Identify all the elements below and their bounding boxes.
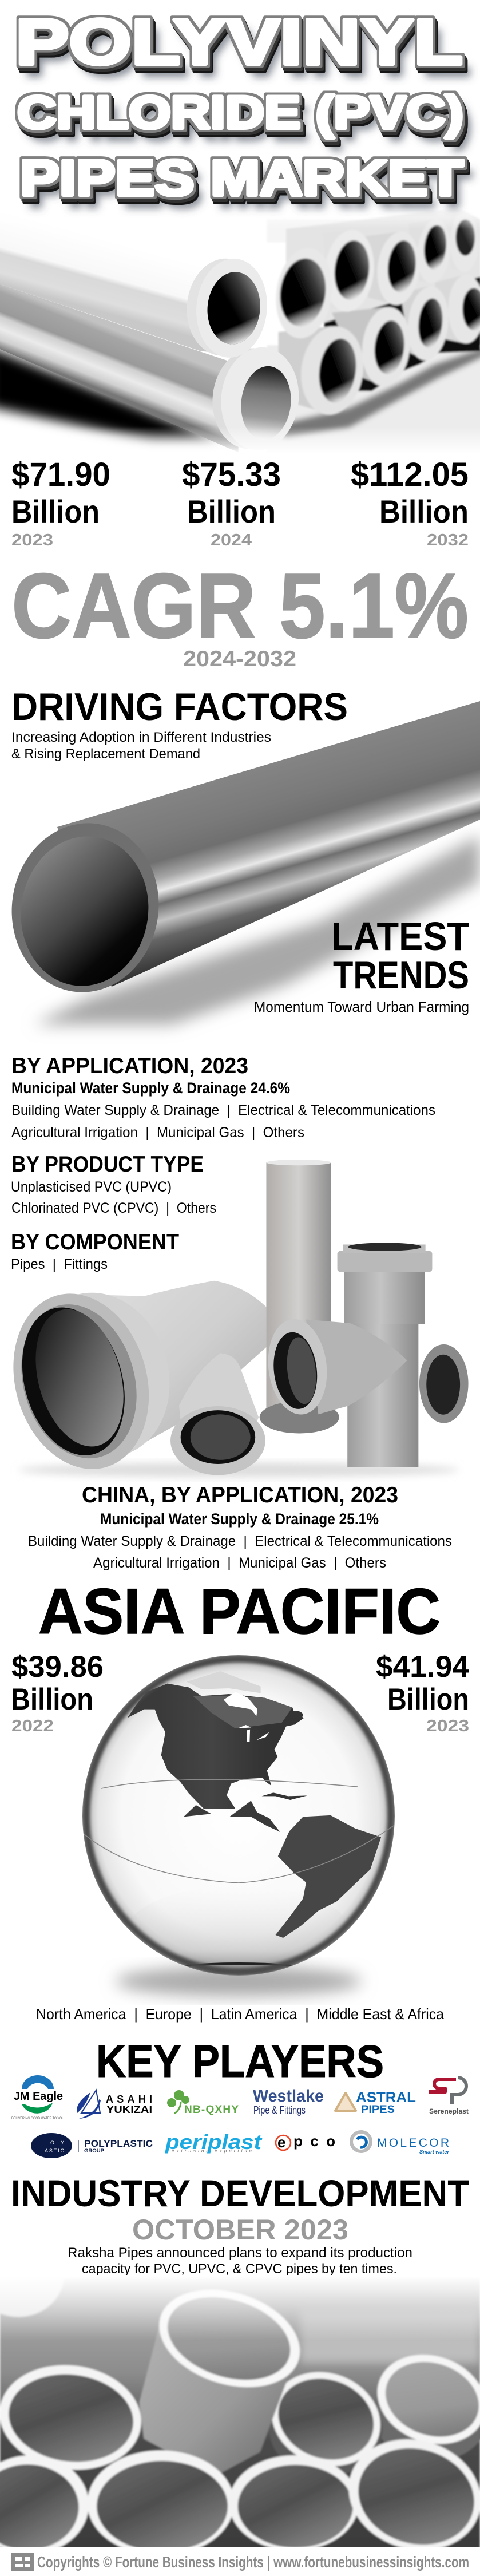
bottom row bbox=[279, 275, 480, 419]
title: POLYVINYL bbox=[15, 6, 463, 78]
by application bbox=[11, 1054, 435, 1141]
logo: Astral Pipes: ASTRAL bbox=[356, 2090, 416, 2106]
logo: Asahi Yukizai: ASAHI bbox=[106, 2094, 152, 2105]
latest trends bbox=[254, 914, 469, 1015]
logo: epco bbox=[276, 2132, 335, 2151]
tall pipe bbox=[260, 1160, 339, 1433]
pipe stack: left side bbox=[0, 247, 299, 452]
stat: 2032 bbox=[351, 456, 469, 549]
stat: 2023: 2023 bbox=[426, 1717, 469, 1735]
logo: Sereneplast: Sereneplast bbox=[429, 2107, 469, 2115]
latest trends: Momentum Toward Urban Farming bbox=[254, 998, 469, 1015]
pipe stack: right side bbox=[267, 208, 480, 460]
by application: BY APPLICATION, 2023 bbox=[11, 1054, 248, 1078]
CAGR: 2024-2032 bbox=[183, 647, 296, 671]
stat: 2023 bbox=[376, 1650, 470, 1735]
stat: 2032: $112.05 bbox=[351, 456, 469, 493]
key players heading: KEY PLAYERS bbox=[96, 2036, 384, 2087]
logo: Polyplastic: POLYPLASTIC bbox=[84, 2138, 153, 2149]
lower pipe bbox=[0, 284, 304, 454]
industry development: capacity for PVC, UPVC, & CPVC pipes by ten times. bbox=[82, 2261, 397, 2277]
logo: Asahi Yukizai: YUKIZAI bbox=[106, 2104, 152, 2115]
logo: JM Eagle: JM Eagle bbox=[14, 2090, 63, 2103]
continent: South America bbox=[184, 1801, 381, 1938]
stat: 2023: $41.94 bbox=[376, 1650, 470, 1684]
by product type: BY PRODUCT TYPE bbox=[11, 1152, 204, 1177]
china by application bbox=[28, 1483, 452, 1571]
china by application: Agricultural Irrigation | Municipal Gas | Others bbox=[93, 1555, 386, 1571]
logos bbox=[11, 2075, 469, 2158]
logo: Polyplastic: GROUP bbox=[84, 2148, 104, 2154]
stat: 2024 bbox=[182, 456, 281, 549]
driving factors: Increasing Adoption in Different Industries bbox=[11, 730, 271, 745]
regions list: North America | Europe | Latin America | Middle East & Africa bbox=[36, 2005, 445, 2023]
stat: 2022: 2022 bbox=[11, 1717, 54, 1735]
by component: BY COMPONENT bbox=[11, 1230, 179, 1255]
stat: 2024: Billion bbox=[187, 493, 276, 529]
driving factors: & Rising Replacement Demand bbox=[11, 746, 200, 762]
logo: Astral Pipes: PIPES bbox=[361, 2104, 395, 2116]
industry development bbox=[11, 2172, 469, 2277]
hero photo: stacked white PVC pipes bbox=[0, 195, 480, 460]
regional stats bbox=[11, 1650, 470, 1735]
bottom photo: PVC pipe cross-sections bbox=[0, 2275, 480, 2547]
logo: Sereneplast bbox=[429, 2078, 469, 2115]
by product type bbox=[11, 1152, 216, 1216]
logo: Polyplastic: OLY bbox=[50, 2140, 64, 2146]
logo: epco: pco bbox=[293, 2132, 335, 2150]
stat: 2022 bbox=[11, 1650, 104, 1735]
globe body bbox=[82, 1655, 395, 1976]
market size stats bbox=[11, 456, 469, 549]
by application: Agricultural Irrigation | Municipal Gas | Others bbox=[11, 1125, 304, 1141]
logo: Polyplastic bbox=[31, 2133, 153, 2158]
large socket pipe bbox=[0, 1279, 266, 1483]
logo: epco: e bbox=[277, 2134, 285, 2151]
by component bbox=[11, 1230, 179, 1272]
stat: 2022: Billion bbox=[11, 1683, 93, 1716]
china by application: CHINA, BY APPLICATION, 2023 bbox=[82, 1483, 398, 1507]
illustration: glass globe bbox=[82, 1655, 395, 1996]
logo: Westlake bbox=[253, 2087, 324, 2116]
top row bbox=[271, 212, 479, 342]
logo: Molecor: Smart water bbox=[419, 2149, 449, 2155]
logo: Asahi Yukizai bbox=[77, 2090, 152, 2119]
center pipe bbox=[138, 2289, 301, 2474]
stat: 2023 bbox=[11, 456, 110, 549]
asia pacific heading: ASIA PACIFIC bbox=[38, 1576, 441, 1647]
globe base shadow bbox=[116, 1966, 362, 1996]
logo: Periplast: periplast bbox=[165, 2130, 263, 2154]
logo: Molecor: MOLECOR bbox=[377, 2136, 449, 2150]
stat: 2023: 2023 bbox=[11, 531, 53, 549]
globe rim shade bbox=[86, 1659, 391, 1972]
logo: JM Eagle bbox=[11, 2075, 64, 2120]
stat: 2024: $75.33 bbox=[182, 456, 281, 493]
title bbox=[15, 6, 463, 206]
stat: 2023: Billion bbox=[387, 1683, 469, 1716]
globe contents bbox=[84, 1659, 394, 1977]
upper pipe bbox=[0, 247, 267, 358]
icon: Fortune Business Insights logo bbox=[11, 2553, 34, 2571]
logo: Westlake: Pipe & Fittings bbox=[253, 2104, 306, 2116]
T fitting bbox=[263, 1243, 432, 1467]
by component: Pipes | Fittings bbox=[11, 1256, 108, 1272]
driving factors: DRIVING FACTORS bbox=[11, 685, 348, 729]
stat: 2032: Billion bbox=[379, 493, 469, 529]
by product type: Unplasticised PVC (UPVC) bbox=[11, 1179, 172, 1195]
photo: PVC fittings bbox=[0, 1160, 469, 1483]
logo: Westlake: Westlake bbox=[253, 2087, 324, 2106]
by application: Municipal Water Supply & Drainage 24.6% bbox=[11, 1079, 290, 1097]
logo: NB-QXHY: NB-QXHY bbox=[184, 2104, 239, 2116]
logo: Molecor bbox=[351, 2132, 449, 2155]
front pipes bbox=[0, 2438, 480, 2547]
continent: North America bbox=[127, 1671, 307, 1809]
logo: Periplast: extrusion expertise bbox=[172, 2148, 252, 2154]
by application: Building Water Supply & Drainage | Electrical & Telecommunications bbox=[11, 1102, 435, 1118]
logo: Astral Pipes bbox=[335, 2090, 416, 2116]
stat: 2023: $71.90 bbox=[11, 456, 110, 493]
industry development: Raksha Pipes announced plans to expand its production bbox=[68, 2245, 412, 2261]
stat: 2032: 2032 bbox=[427, 531, 469, 549]
latest trends: LATEST bbox=[331, 914, 469, 959]
logo: JM Eagle: DELIVERING GOOD WATER TO YOU bbox=[11, 2117, 64, 2120]
china by application: Building Water Supply & Drainage | Electrical & Telecommunications bbox=[28, 1533, 452, 1549]
small elbow bbox=[170, 1353, 265, 1475]
right elbow bbox=[419, 1344, 469, 1423]
photo: grey PVC pipe bbox=[1, 701, 480, 1024]
stat: 2024: 2024 bbox=[211, 531, 252, 549]
back pipes bbox=[0, 2353, 480, 2474]
logo: Polyplastic: ASTIC bbox=[45, 2148, 64, 2154]
stat: 2022: $39.86 bbox=[11, 1650, 104, 1684]
china by application: Municipal Water Supply & Drainage 25.1% bbox=[100, 1510, 379, 1528]
logo: NB-QXHY bbox=[167, 2090, 239, 2116]
title: CHLORIDE (PVC) bbox=[17, 87, 463, 139]
industry development: OCTOBER 2023 bbox=[132, 2214, 348, 2246]
title: PIPES MARKET bbox=[20, 149, 463, 206]
driving factors bbox=[11, 685, 348, 762]
by product type: Chlorinated PVC (CPVC) | Others bbox=[11, 1200, 216, 1216]
stat: 2023: Billion bbox=[11, 493, 100, 529]
